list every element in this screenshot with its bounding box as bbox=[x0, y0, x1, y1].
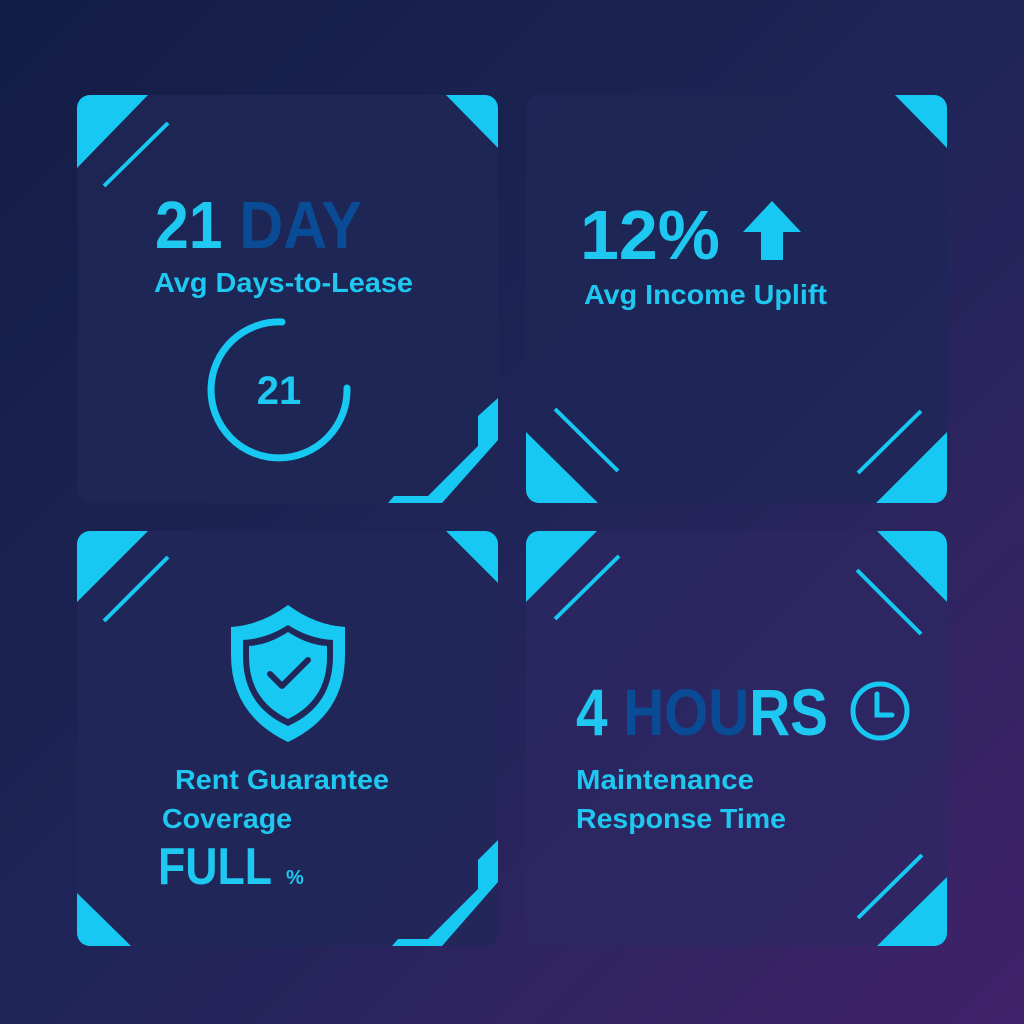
panel: maintenance response bbox=[526, 531, 947, 946]
label: Maintenance Response Time: Maintenance bbox=[576, 764, 754, 795]
label: Rent Guarantee Coverage: Rent Guarantee bbox=[175, 764, 389, 795]
label: Maintenance Response Time: Response Time bbox=[576, 803, 786, 834]
value: FULL %: FULL bbox=[158, 838, 272, 896]
label: Maintenance Response Time bbox=[576, 764, 786, 834]
label: Avg Days-to-Lease: Avg Days-to-Lease bbox=[154, 267, 413, 298]
icon: up arrow bbox=[743, 201, 801, 260]
value: FULL %: % bbox=[286, 867, 304, 889]
label: Rent Guarantee Coverage: Coverage bbox=[162, 803, 292, 834]
heading: 12%: 12% bbox=[580, 196, 720, 274]
panel: days to lease bbox=[77, 95, 498, 503]
label: Avg Income Uplift: Avg Income Uplift bbox=[584, 279, 827, 310]
panel: rent guarantee bbox=[77, 531, 498, 946]
icon: shield with check bbox=[231, 605, 345, 742]
ring chart bbox=[211, 322, 347, 458]
icon: clock bbox=[853, 684, 907, 738]
label: Rent Guarantee Coverage bbox=[162, 764, 389, 834]
heading: 21 DAY: 21 DAY bbox=[155, 188, 362, 263]
heading: 4 HOURS: 4 HOURS bbox=[576, 675, 828, 749]
panel: income uplift bbox=[526, 95, 947, 503]
ring chart: 21 bbox=[257, 369, 301, 413]
